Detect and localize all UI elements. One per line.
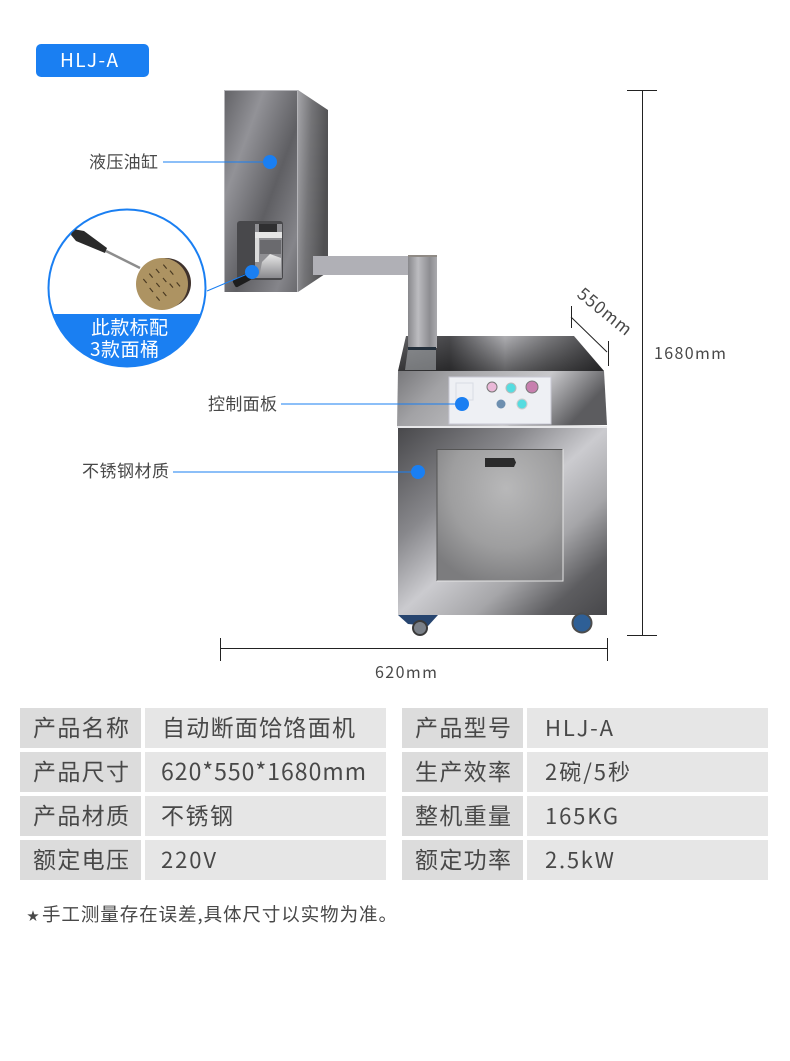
casters	[398, 614, 592, 635]
row 4: 额定电压	[33, 841, 129, 875]
callout: control panel	[208, 390, 469, 415]
dimension: height 1680mm: 1680mm	[654, 340, 726, 364]
connecting arm	[313, 256, 409, 275]
callout: hydraulic cylinder	[89, 148, 277, 173]
blue caption band	[54, 314, 200, 366]
die handle	[71, 229, 140, 268]
caption text: 3款面桶	[90, 335, 159, 362]
machine illustration	[224, 90, 607, 635]
model badge	[36, 44, 149, 77]
row 1	[20, 708, 768, 748]
discharge chute	[408, 255, 437, 350]
row 2: 生产效率	[415, 753, 511, 787]
row 3: 165KG	[545, 799, 618, 831]
lower cabinet	[397, 336, 607, 615]
caption text: 此款标配	[91, 313, 168, 340]
dimension: width 620mm: 620mm	[375, 659, 437, 683]
row 2: 620*550*1680mm	[161, 753, 366, 787]
row 3: 产品材质	[33, 797, 129, 831]
callout: stainless steel material	[82, 457, 425, 482]
dimension: depth 550mm: 550mm	[573, 280, 638, 340]
callout: control panel: 控制面板	[208, 390, 277, 415]
dimension: height 1680mm	[627, 90, 726, 636]
row 1: HLJ-A	[545, 711, 614, 743]
row 2	[20, 752, 768, 792]
row 4: 220V	[161, 843, 216, 875]
upper hydraulic housing	[224, 90, 328, 292]
row 1: 产品型号	[415, 709, 511, 743]
caption text	[90, 313, 168, 362]
callout: hydraulic cylinder: 液压油缸	[89, 148, 158, 173]
row 1: 自动断面饸饹面机	[162, 709, 355, 743]
footnote: 手工测量存在误差,具体尺寸以实物为准。	[42, 901, 397, 927]
footnote: ★	[27, 907, 39, 924]
specification table	[20, 708, 768, 880]
row 4: 额定功率	[415, 841, 511, 875]
callout: stainless steel material: 不锈钢材质	[82, 457, 169, 482]
row 1: 产品名称	[33, 709, 129, 743]
dimension: depth 550mm	[571, 280, 638, 366]
dimension: width 620mm	[220, 638, 608, 683]
row 4: 2.5kW	[545, 843, 614, 875]
die plate	[136, 258, 191, 310]
row 3	[20, 796, 768, 836]
row 2: 产品尺寸	[33, 753, 129, 787]
row 2: 2碗/5秒	[545, 755, 630, 787]
row 3: 整机重量	[415, 797, 511, 831]
control panel	[449, 377, 551, 424]
row 4	[20, 840, 768, 880]
model badge: HLJ-A	[60, 46, 118, 73]
row 3: 不锈钢	[161, 797, 233, 831]
callout: noodle die detail circle	[40, 210, 259, 374]
